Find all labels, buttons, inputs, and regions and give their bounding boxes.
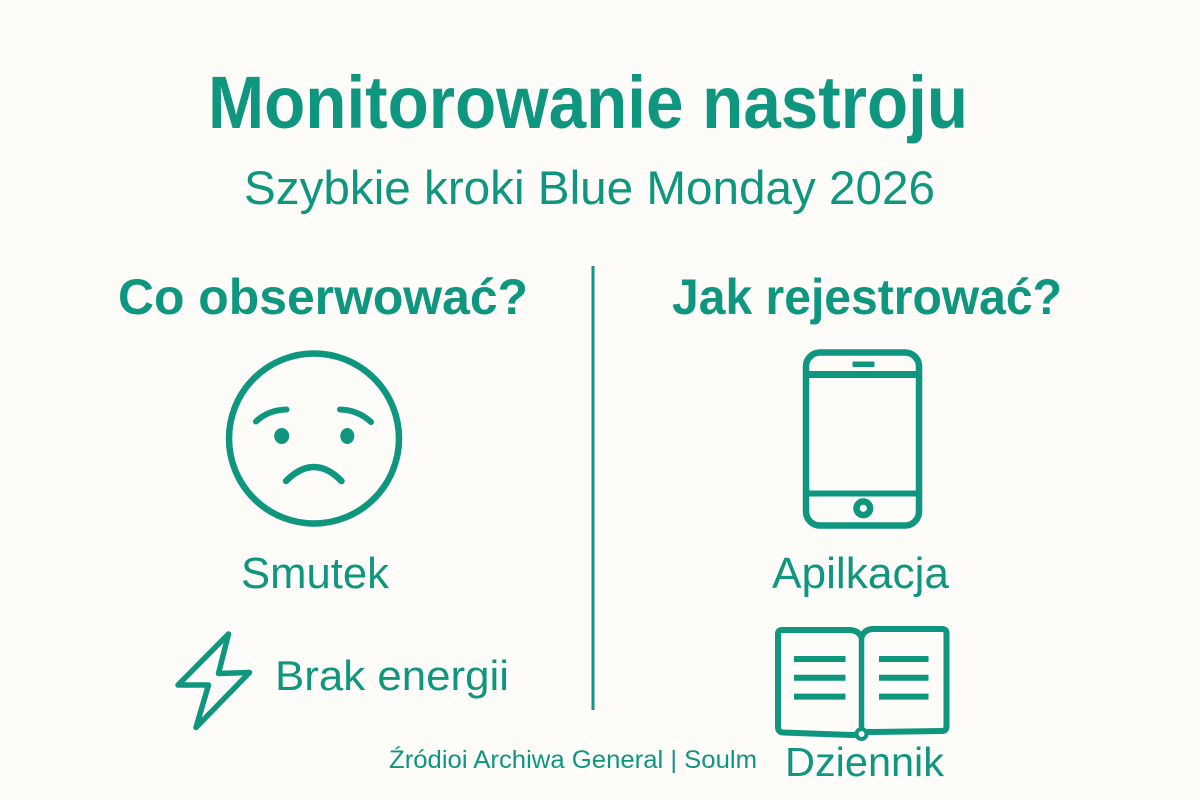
heading: Co obserwować: Co obserwować?	[118, 269, 528, 325]
icon: lightning bolt	[178, 634, 250, 728]
label: Brak energii: Brak energii	[275, 652, 509, 699]
subtitle: Szybkie kroki Blue Monday 2026	[244, 161, 935, 214]
icon: open book	[778, 629, 946, 739]
label: Dziennik: Dziennik	[785, 739, 945, 785]
label: Apilkacja: Apilkacja	[772, 549, 950, 598]
heading: Jak rejestrować: Jak rejestrować?	[672, 269, 1062, 325]
source note: Źródioi Archiwa General | Soulm	[389, 745, 757, 774]
label: Smutek: Smutek	[241, 549, 390, 598]
title: Monitorowanie nastroju	[208, 61, 968, 144]
icon: sad face	[229, 354, 399, 524]
icon: smartphone	[806, 352, 919, 526]
